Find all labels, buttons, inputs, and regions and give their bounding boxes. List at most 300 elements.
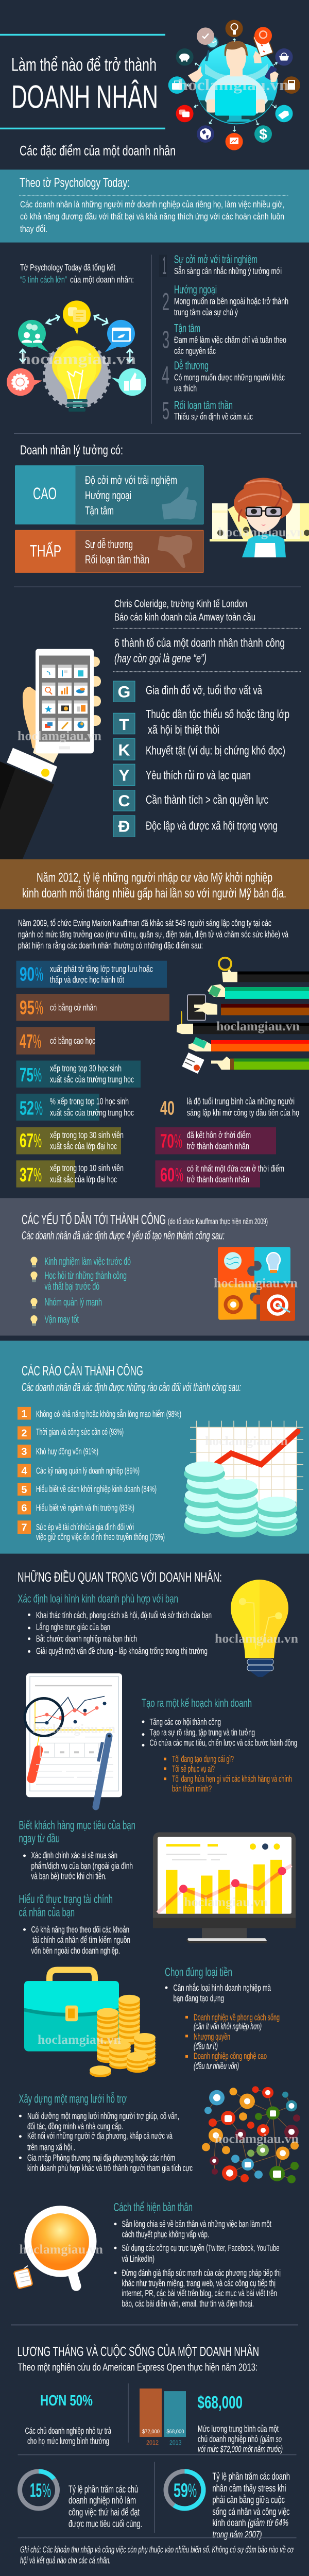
panel: high traits xyxy=(15,466,203,524)
bullet list: Gia nhập Phòng thương mại địa phương hoặc các nhóm xyxy=(27,2153,175,2163)
arm 6 pointing with document xyxy=(182,1053,309,1074)
chart: percentage bars xyxy=(16,961,299,1188)
heading: salary and life xyxy=(17,2344,259,2374)
bullet list xyxy=(114,2219,281,2309)
clasp xyxy=(65,2006,78,2021)
barrier 5 xyxy=(18,1483,157,1496)
barrier 7: Sức ép về tài chính/của gia đình đối với xyxy=(36,1522,134,1532)
bubble: green people xyxy=(18,320,48,352)
bar 60 percent: % xyxy=(175,1164,183,1186)
icon: dollar circle xyxy=(254,125,272,143)
banner: immigrant statistic xyxy=(0,859,309,909)
icon: price tag circle xyxy=(275,105,293,122)
arms and shirt xyxy=(205,64,268,84)
bar 90 percent xyxy=(16,961,167,988)
bar 47 percent: 47 xyxy=(20,1031,33,1053)
barrier 7 xyxy=(18,1520,165,1542)
panel: Psychology Today intro xyxy=(0,170,309,243)
trait 5: Rối loạn tâm thần xyxy=(174,399,233,412)
bullet list: trên mạng xã hội . xyxy=(27,2142,75,2152)
stat: 59 percent ring: 59 xyxy=(174,2480,188,2502)
bar 90 percent: 90 xyxy=(20,963,35,985)
glasses xyxy=(246,507,262,516)
barrier 3: Khó huy động vốn (91%) xyxy=(36,1446,98,1456)
bar 52 percent: % xếp trong top 10 học sinh xyxy=(50,1096,129,1107)
trait 3 xyxy=(162,322,286,356)
stat: 15 percent ring: 15 xyxy=(30,2480,42,2502)
barrier 7: việc giữ công việc ổn định theo truyền thống (73%) xyxy=(36,1532,165,1542)
barrier 1: 1 xyxy=(21,1409,27,1420)
barrier 2: Thời gian và công sức cần có (93%) xyxy=(36,1427,124,1437)
arm 2 with calculator xyxy=(208,984,309,999)
trait 2 xyxy=(162,283,288,317)
text: Chris Coleridge source xyxy=(114,598,255,623)
subheading: cá nhân của bạn xyxy=(19,1906,75,1919)
bullet list: Khai thác tính cách, phong cách xã hội, độ tuổi và sở thích của bạn xyxy=(36,1610,212,1620)
arm 1 with ring xyxy=(219,958,309,982)
item Y: Y xyxy=(118,766,130,785)
watermark: hoclamgiau.vn xyxy=(214,1276,298,1290)
bar 67 percent xyxy=(16,1127,124,1154)
icon: chart board circle xyxy=(226,133,243,150)
watermark: hoclamgiau.vn xyxy=(216,1019,300,1033)
illustration: lightbulb with speech bubbles xyxy=(7,300,146,412)
icon: globe circle xyxy=(197,125,214,143)
ring caption: trong năm 2007) xyxy=(212,2529,262,2540)
money types list: (đầu tư ít) xyxy=(194,2041,218,2052)
illustration: business plan clipboard xyxy=(25,1673,122,1807)
high traits list: Hướng ngoại xyxy=(85,489,131,502)
bubble: aqua thumb up xyxy=(111,368,146,396)
barrier 3 xyxy=(18,1445,98,1458)
item K: K xyxy=(118,740,130,759)
subheading: Xác định loại hình kinh doanh phù hợp với bạn xyxy=(18,1592,178,1605)
arrows around the circle xyxy=(187,39,277,131)
illustration: social network graph xyxy=(202,2086,300,2183)
hair xyxy=(244,478,283,498)
bar 70 percent: 70 xyxy=(160,1131,174,1153)
chart lines xyxy=(35,1699,36,1735)
barrier 4 xyxy=(18,1464,140,1477)
bar 70 percent: % xyxy=(174,1131,182,1153)
watermark: hoclamgiau.vn xyxy=(178,76,289,94)
trait 3: 3 xyxy=(162,326,169,353)
bullet list: cách thuyết phục không vấp váp. xyxy=(122,2229,209,2239)
trait 2: Hướng ngoại xyxy=(174,283,217,296)
ring caption: doanh nghiệp nhỏ làm xyxy=(68,2495,136,2506)
panel: barriers to success xyxy=(0,1341,309,1554)
trait 3: Tận tâm xyxy=(174,322,200,335)
icon: lightbulb circle xyxy=(226,20,243,37)
bullet list: Bắt chước doanh nghiệp mà bạn thích xyxy=(36,1633,137,1644)
footnote: hội và kết quả nào cho các cá nhân. xyxy=(20,2555,111,2565)
face xyxy=(245,506,281,533)
intro text xyxy=(20,199,284,234)
trait 4: ưa thích xyxy=(174,383,197,393)
item G: G xyxy=(118,683,130,701)
text: Kauffman survey xyxy=(18,918,288,951)
title line 1: Làm thể nào để trở thành xyxy=(11,55,157,75)
bullet text xyxy=(23,1850,133,1881)
icon: check circle xyxy=(197,27,214,45)
bubble: blue browser xyxy=(105,320,135,352)
orange question list: bản thân mình? xyxy=(172,1783,212,1793)
illustration: big light bulb xyxy=(231,1580,288,1677)
bar 2013: 2013 xyxy=(169,2439,182,2446)
bar 75 percent: xếp trong top 30 học sinh xyxy=(50,1063,122,1073)
item D: Đ xyxy=(118,817,130,836)
bar 95 percent xyxy=(16,994,169,1021)
barrier 7: 7 xyxy=(21,1522,27,1533)
text: Chris Coleridge source: Báo cáo kinh doanh của Amway toàn cầu xyxy=(114,611,255,623)
bar 52 percent: 52 xyxy=(20,1098,34,1119)
bullet text xyxy=(23,1924,130,1956)
bar 37 percent xyxy=(16,1160,124,1188)
trait 4: 4 xyxy=(162,362,169,389)
bubble: yellow chat xyxy=(63,300,91,335)
icon: basket circle xyxy=(275,48,293,66)
stat: 15 percent ring xyxy=(20,2471,142,2530)
bar 37 percent: 37 xyxy=(20,1164,33,1186)
low traits list xyxy=(85,538,149,566)
money types list: Nhượng quyền xyxy=(194,2031,230,2042)
bar 2012: $72,000 xyxy=(142,2429,160,2435)
bullet list: và LinkedIn) xyxy=(122,2253,154,2264)
ring caption: Tỷ lệ phần trăm các chủ xyxy=(68,2484,138,2495)
bar 47 percent: có bằng cao học xyxy=(50,1035,95,1046)
handle xyxy=(49,1970,95,1982)
item D xyxy=(113,816,278,837)
section: personal finances xyxy=(19,1892,130,1956)
stat: more than 50 percent xyxy=(25,2393,111,2446)
barrier 2: 2 xyxy=(21,1428,27,1439)
icon: chat circle xyxy=(176,105,194,122)
bar 2013 xyxy=(164,2391,186,2446)
trait 4 xyxy=(162,359,285,393)
watermark: hoclamgiau.vn xyxy=(205,1433,288,1448)
illustration: puzzle pieces xyxy=(218,1247,295,1321)
ring caption: (giảm từ 64% xyxy=(248,2517,288,2529)
panel: low traits xyxy=(15,530,203,572)
sleeve xyxy=(0,761,54,859)
icon: thumb down xyxy=(158,535,192,568)
bubble: coral gear xyxy=(7,368,42,396)
bullet list: Nuôi dưỡng một mạng lưới những người trợ giúp, cố vấn, xyxy=(27,2111,179,2121)
text: big five intro: “5 tính cách lớn” xyxy=(20,275,67,285)
ring caption: công việc thứ hai để đạt xyxy=(68,2506,140,2518)
trait 5 xyxy=(162,397,253,425)
money types list: (cần ít vốn khởi nghiệp hơn) xyxy=(194,2021,262,2031)
factor 2: Học hỏi từ những thành công xyxy=(44,1270,127,1282)
stat: 68000 dollars: $68,000 xyxy=(197,2393,243,2413)
hand xyxy=(23,687,51,757)
monitor xyxy=(215,85,256,115)
icon: piggy bank circle xyxy=(176,48,194,66)
barrier 6 xyxy=(18,1501,134,1514)
ring caption xyxy=(212,2471,290,2540)
subheading xyxy=(19,1892,113,1919)
arm 4 with pen xyxy=(177,1011,309,1034)
table lines xyxy=(36,1737,113,1785)
factor 4: Vận may tốt xyxy=(44,1314,79,1326)
bullet text: Xác định chính xác ai sẽ mua sản xyxy=(31,1850,117,1860)
stat: 68000 dollars: chủ doanh nghiệp nhỏ xyxy=(198,2434,258,2444)
item C: Cần thành tích > cần quyền lực xyxy=(146,793,268,806)
bullet text: tài chính cá nhân để tìm kiếm nguồn xyxy=(32,1935,130,1945)
subtitle: Các đặc điểm của một doanh nhân xyxy=(20,143,176,159)
watermark: hoclamgiau.vn xyxy=(21,350,136,368)
bullet list xyxy=(28,1610,212,1656)
subheading: Xây dựng một mạng lưới hỗ trợ xyxy=(19,2092,127,2105)
bar 90 percent: xuất phát từ tầng lớp trung lưu hoặc xyxy=(50,964,153,974)
list: gene e letters xyxy=(113,681,289,837)
stat 40 age xyxy=(160,1096,299,1119)
bullet list: Tăng các cơ hội thành công xyxy=(149,1717,221,1727)
bullet list: đối tác, đồng minh và nhà cung cấp. xyxy=(27,2121,123,2131)
trait 1 xyxy=(159,252,282,280)
item K xyxy=(113,739,285,760)
barrier 1 xyxy=(18,1407,181,1420)
watermark: hoclamgiau.vn xyxy=(184,1894,268,1909)
text: big five intro xyxy=(20,262,134,285)
trait 4: Dễ thương xyxy=(174,359,209,372)
stat 40 age: 40 xyxy=(160,1098,175,1119)
stat: 15 percent ring: % xyxy=(42,2480,51,2502)
trait 2: trung tâm của sự chú ý xyxy=(174,307,238,317)
illustration: cup of tea xyxy=(14,2206,96,2289)
text: Kauffman survey: phát hiện ra rằng các doanh nhân thường có những đặc điểm sau: xyxy=(18,940,203,951)
bar 37 percent: % xyxy=(33,1164,42,1186)
stat: more than 50 percent: HƠN 50% xyxy=(40,2393,93,2409)
factor 2 xyxy=(30,1270,127,1292)
ring caption: kinh doanh xyxy=(212,2517,246,2529)
illustration: woman with glasses and binders xyxy=(210,478,309,557)
bar 37 percent: xếp trong top 10 sinh viên xyxy=(50,1163,124,1173)
panel heading: CÁC RÀO CẢN THÀNH CÔNG xyxy=(22,1363,143,1379)
bullet text: Có khả năng theo theo dõi các khoản xyxy=(31,1924,129,1935)
barrier 6: Hiểu biết về ngành và thị trường (83%) xyxy=(36,1503,134,1513)
text: Chris Coleridge source: Chris Coleridge, trường Kinh tế London xyxy=(114,598,247,610)
bar 2013: $68,000 xyxy=(166,2429,184,2435)
high traits list: Tận tâm xyxy=(85,504,114,517)
section: self presentation xyxy=(113,2200,281,2309)
subheading: ngay từ đầu xyxy=(19,1832,60,1845)
bar 60 percent: trở thành doanh nhân xyxy=(187,1174,249,1184)
factor 1 xyxy=(30,1256,131,1267)
panel heading: CÁC YẾU TỐ DẪN TỚI THÀNH CÔNG xyxy=(22,1212,166,1227)
bar 67 percent: 67 xyxy=(20,1130,33,1152)
watermark: hoclamgiau.vn xyxy=(19,2242,103,2257)
raised hands xyxy=(188,66,203,82)
footnote xyxy=(20,2545,294,2565)
barrier 5: 5 xyxy=(21,1484,27,1496)
bar 90 percent: thấp và được học hành tốt xyxy=(50,974,124,985)
subheading: Chọn đúng loại tiền xyxy=(165,1965,232,1978)
heading: six elements: (hay còn gọi là gene “e”) xyxy=(114,651,207,665)
subheading: Biết khách hàng mục tiêu của bạn xyxy=(19,1819,135,1832)
barrier 6: 6 xyxy=(21,1503,27,1514)
magnifier xyxy=(25,1698,63,1736)
section: choose business type xyxy=(18,1592,212,1656)
item G xyxy=(113,681,262,702)
bar 2012 xyxy=(140,2388,162,2446)
orange question list: Tôi sẽ phục vụ ai? xyxy=(172,1764,215,1774)
watermark: hoclamgiau.vn xyxy=(215,2131,299,2146)
bar 47 percent: % xyxy=(33,1031,41,1053)
bar 52 percent xyxy=(16,1094,134,1121)
header: title block xyxy=(0,34,176,159)
gold coin stacks xyxy=(90,1995,156,2077)
bar 75 percent: xuất sắc của trường trung học xyxy=(50,1074,134,1084)
illustration: hand holding phone xyxy=(0,649,101,859)
subheading: Hiểu rõ thực trạng tài chính xyxy=(19,1892,113,1906)
bar 70 percent xyxy=(156,1127,276,1154)
item Y: Yêu thích rủi ro và lạc quan xyxy=(146,769,251,782)
item C xyxy=(113,790,268,811)
watermark: hoclamgiau.vn xyxy=(32,1721,115,1736)
watermark: hoclamgiau.vn xyxy=(38,2032,121,2047)
arm 3 with tablet xyxy=(187,995,309,1020)
item T: T xyxy=(119,715,129,734)
factor 2: và thất bại trước đó xyxy=(44,1281,99,1292)
factor 4 xyxy=(30,1314,79,1326)
arm 5 with banknotes xyxy=(188,1037,309,1052)
barrier 4: Các kỹ năng quản lý doanh nghiệp (89%) xyxy=(36,1465,140,1476)
bullet list: Lắng nghe trực giác của bạn xyxy=(36,1621,110,1632)
bullet list xyxy=(19,2111,193,2173)
bar 67 percent: xếp trong top 30 sinh viên xyxy=(50,1130,124,1140)
item C: C xyxy=(118,791,130,810)
icon: thumb up xyxy=(162,487,197,520)
subheading: Tạo ra một kế hoạch kinh doanh xyxy=(142,1697,252,1709)
intro text: thay đổi. xyxy=(20,224,47,234)
money types list xyxy=(185,2012,280,2071)
bar 75 percent xyxy=(16,1061,141,1088)
item T: xã hội bị thiệt thòi xyxy=(148,723,219,736)
heading: ideal entrepreneur: Doanh nhân lý tưởng có: xyxy=(20,444,123,457)
phone xyxy=(36,649,94,753)
money types list: (đầu tư nhiều vốn) xyxy=(194,2061,239,2071)
stat: 59 percent ring: % xyxy=(188,2480,197,2502)
illustration: briefcase and gold coins xyxy=(24,1970,156,2077)
bar 2012: 2012 xyxy=(146,2439,159,2446)
bullet text: phẩm/dịch vụ của bạn (ngoài gia đình xyxy=(31,1861,133,1871)
bar 70 percent: trở thành doanh nhân xyxy=(187,1141,249,1151)
bar 95 percent: có bằng cử nhân xyxy=(50,1002,97,1013)
factor 1: Kinh nghiệm làm việc trước đó xyxy=(44,1256,131,1267)
trait 2: 2 xyxy=(162,288,169,316)
low traits list: Rối loạn tâm thần xyxy=(85,553,149,566)
app icons xyxy=(45,670,85,729)
orange question list: Tôi đang tạo dựng cái gì? xyxy=(172,1754,234,1764)
bullet text xyxy=(165,1982,271,2004)
panel: success factors xyxy=(0,1198,309,1335)
bullet list xyxy=(142,1717,297,1748)
bar 52 percent: xuất sắc của trường trung học xyxy=(50,1107,134,1117)
subheading xyxy=(19,1819,135,1845)
bar 90 percent: % xyxy=(35,963,43,985)
ring caption: được mục tiêu cuối cùng. xyxy=(68,2518,142,2530)
bullet text: bạn đang tạo dựng xyxy=(173,1993,224,2004)
trait 3: các nguyên tắc xyxy=(174,345,216,356)
chart: average salary bars xyxy=(140,2388,186,2446)
stat: 68000 dollars xyxy=(197,2393,283,2454)
item Y xyxy=(113,764,251,786)
bar 75 percent: % xyxy=(33,1064,42,1086)
bulb xyxy=(52,340,101,399)
low traits list: Sự dễ thương xyxy=(85,538,133,551)
panel heading: Theo tờ Psychology Today: xyxy=(20,176,130,190)
barrier 4: 4 xyxy=(21,1465,27,1477)
trait 5: Thiếu sự ổn định về cảm xúc xyxy=(174,412,253,422)
illustration: rising chart with coins xyxy=(184,1421,303,1537)
bar 37 percent: xuất sắc của lớp đại học xyxy=(50,1174,117,1184)
gear behind bulb xyxy=(45,344,109,407)
item T xyxy=(113,707,289,736)
text: big five intro: của một doanh nhân: xyxy=(70,275,134,285)
bar 60 percent: 60 xyxy=(160,1164,175,1186)
barrier 5: Hiểu biết về cách khởi nghiệp kinh doanh (84%) xyxy=(36,1484,157,1494)
factor 3: Nhóm quản lý mạnh xyxy=(44,1296,102,1308)
high traits list xyxy=(85,473,177,517)
app cells xyxy=(42,665,88,731)
double arrows xyxy=(20,315,133,362)
bar 95 percent: 95 xyxy=(20,997,35,1019)
section: choose the right money xyxy=(165,1965,280,2071)
bar 52 percent: % xyxy=(35,1098,43,1119)
bar 67 percent: % xyxy=(33,1130,42,1152)
head xyxy=(230,66,243,76)
trait 1: Sự cởi mở với trải nghiệm xyxy=(174,253,258,266)
factor 3 xyxy=(30,1296,102,1309)
cuff xyxy=(7,748,57,782)
ring caption xyxy=(68,2484,142,2530)
trait 1: 1 xyxy=(162,252,166,280)
barrier 3: 3 xyxy=(21,1446,27,1458)
case xyxy=(24,1981,119,2052)
section: target customers xyxy=(19,1819,135,1881)
stat: 59 percent ring xyxy=(166,2471,290,2540)
fingers xyxy=(88,656,101,726)
illustration: monitor with chart xyxy=(153,1832,296,1943)
bar 95 percent: % xyxy=(35,997,43,1019)
title line 2: DOANH NHÂN xyxy=(11,79,158,115)
bullet list: Kết nối với những người ở địa phương, khắp cả nước và xyxy=(27,2130,173,2141)
body xyxy=(242,534,286,557)
icon: briefcase circle xyxy=(168,76,186,94)
trait 5: 5 xyxy=(162,397,169,425)
bullet text: vốn bên ngoài cho doanh nghiệp. xyxy=(31,1945,120,1956)
text: big five intro: Tờ Psychology Today đã tổng kết xyxy=(20,262,115,273)
section: support network xyxy=(19,2092,193,2173)
illustration: multitasking businessman with icon ring xyxy=(168,20,300,150)
section: business plan xyxy=(142,1697,297,1793)
heading: six elements xyxy=(114,636,285,665)
coin stacks xyxy=(184,1462,298,1537)
bar 75 percent: 75 xyxy=(20,1064,33,1086)
barrier 2 xyxy=(18,1426,124,1439)
bullet text: và bạn bè) trước khi chi tiền. xyxy=(31,1871,107,1881)
stat: more than 50 percent: cho họ mức lương bình thường xyxy=(27,2436,109,2446)
bullet list: kinh doanh phù hợp khác và trở thành người tham gia tích cực xyxy=(27,2163,193,2173)
high traits list: Độ cởi mở với trải nghiệm xyxy=(85,473,177,486)
icon: calculator circle xyxy=(283,76,300,94)
bar 70 percent: đã kết hôn ở thời điểm xyxy=(187,1130,251,1140)
subheading: Cách thể hiện bản thân xyxy=(113,2200,193,2214)
pen xyxy=(96,1736,109,1807)
icon: orange target circle xyxy=(254,27,272,44)
stat: more than 50 percent: Các chủ doanh nghiệp nhỏ tự trả xyxy=(25,2426,111,2436)
